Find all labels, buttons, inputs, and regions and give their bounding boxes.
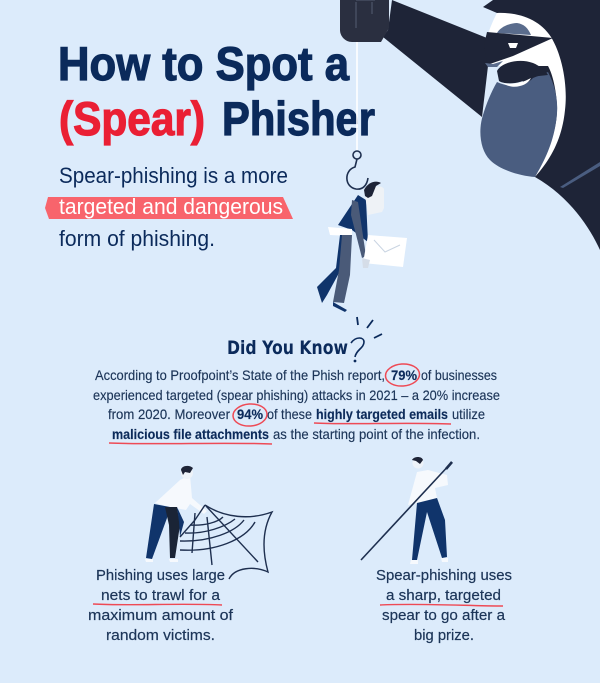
caption: spear-phishing: spear to go after a: [382, 607, 506, 624]
subtitle: form of phishing.: [59, 226, 215, 251]
text block: statistics paragraph: According to Proofpoint’s State of the Phish report,: [95, 368, 385, 383]
illustration: man with net: [145, 466, 272, 579]
title: Phisher: [222, 92, 375, 145]
caption: spear-phishing: big prize.: [414, 627, 474, 644]
illustration: hooded phisher: [383, 0, 600, 250]
caption: spear-phishing: [376, 567, 512, 644]
text block: statistics paragraph: as the starting point of the infection.: [273, 427, 480, 442]
title: [58, 37, 375, 145]
highlight: targeted and dangerous: [45, 197, 293, 219]
caption: spear-phishing: Spear-phishing uses: [376, 567, 512, 584]
text block: statistics paragraph: utilize: [452, 407, 485, 422]
net: [180, 505, 272, 579]
text block: statistics paragraph: from 2020. Moreover: [108, 407, 230, 422]
illustration: man with spear: [361, 457, 452, 564]
subtitle: Spear-phishing is a more: [59, 163, 288, 188]
title: How to Spot a: [58, 37, 350, 90]
caption: phishing: nets to trawl for a: [101, 587, 221, 604]
caption: phishing: Phishing uses large: [96, 567, 225, 584]
text block: statistics paragraph: [93, 368, 500, 442]
icon: fist holding line: [340, 0, 389, 42]
caption: spear-phishing: a sharp, targeted: [386, 587, 501, 604]
caption: phishing: random victims.: [106, 627, 215, 644]
annotations: red circles and underlines: [109, 363, 451, 444]
text block: statistics paragraph: of businesses: [421, 368, 497, 383]
subtitle: targeted and dangerous: [59, 194, 283, 219]
subtitle: [45, 163, 293, 251]
text block: statistics paragraph: 94%: [237, 407, 263, 422]
illustration: man caught on hook with envelope: [317, 182, 407, 312]
title: (Spear): [59, 92, 205, 145]
caption: phishing: [88, 567, 234, 644]
caption: phishing: maximum amount of: [88, 607, 234, 624]
text block: statistics paragraph: malicious file attachments: [112, 427, 269, 442]
heading: did you know: [227, 317, 382, 362]
envelope: [363, 235, 407, 267]
text block: statistics paragraph: 79%: [391, 368, 417, 383]
heading: did you know: Did You Know: [227, 337, 348, 359]
text block: statistics paragraph: experienced targeted (spear phishing) attacks in 2021 – a 20% increase: [93, 388, 500, 403]
text block: statistics paragraph: of these: [267, 407, 312, 422]
text block: statistics paragraph: highly targeted emails: [316, 407, 448, 422]
fishing line and hook: [347, 42, 368, 189]
